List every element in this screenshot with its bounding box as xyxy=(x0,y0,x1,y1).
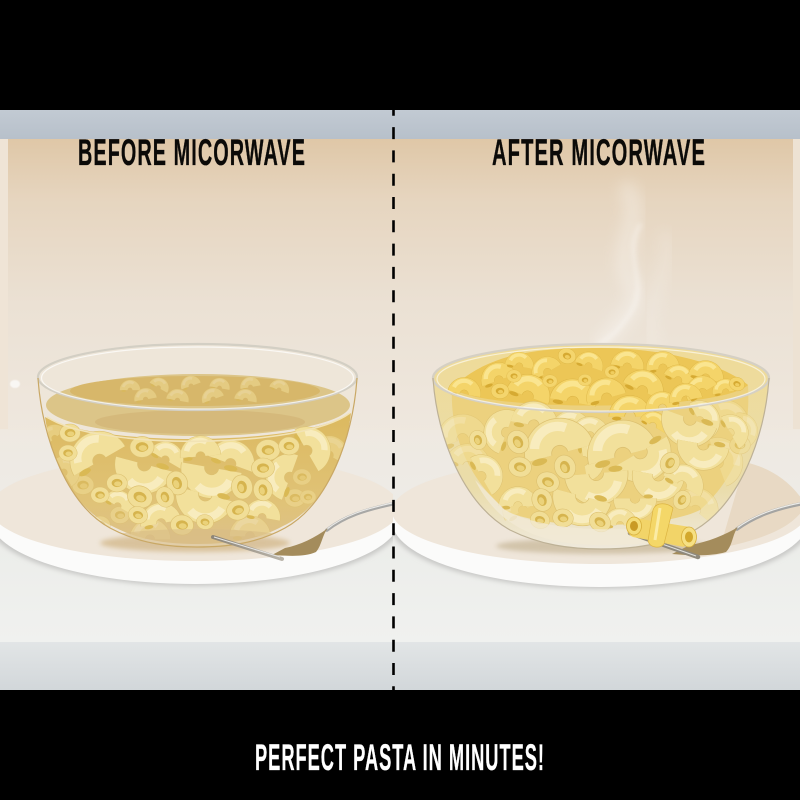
glass rim left xyxy=(38,344,357,547)
glass bowl with pasta xyxy=(433,344,769,554)
panel: before microwave xyxy=(0,110,402,690)
pasta pile xyxy=(436,346,755,545)
upper pasta layer xyxy=(450,346,747,433)
microwave interior background right xyxy=(393,110,800,690)
dashed divider xyxy=(392,104,395,690)
panel: after microwave xyxy=(390,110,800,690)
fork left xyxy=(213,503,392,559)
water surface with submerged pasta xyxy=(46,374,350,436)
glass rim right xyxy=(433,344,769,549)
milky bottom of bowl xyxy=(476,480,608,532)
glass bowl with water and pasta xyxy=(38,343,357,552)
plate left xyxy=(0,468,393,588)
front glass bottom haze xyxy=(122,529,272,546)
lower pasta layer xyxy=(467,398,748,536)
microwave interior background left xyxy=(0,110,393,690)
pasta on fork xyxy=(626,504,696,547)
heading: before: BEFORE MICORWAVE xyxy=(78,132,306,173)
fork right with pasta xyxy=(626,503,800,557)
pasta pieces in water xyxy=(39,424,347,551)
plate right xyxy=(390,455,800,589)
steam xyxy=(596,183,644,343)
